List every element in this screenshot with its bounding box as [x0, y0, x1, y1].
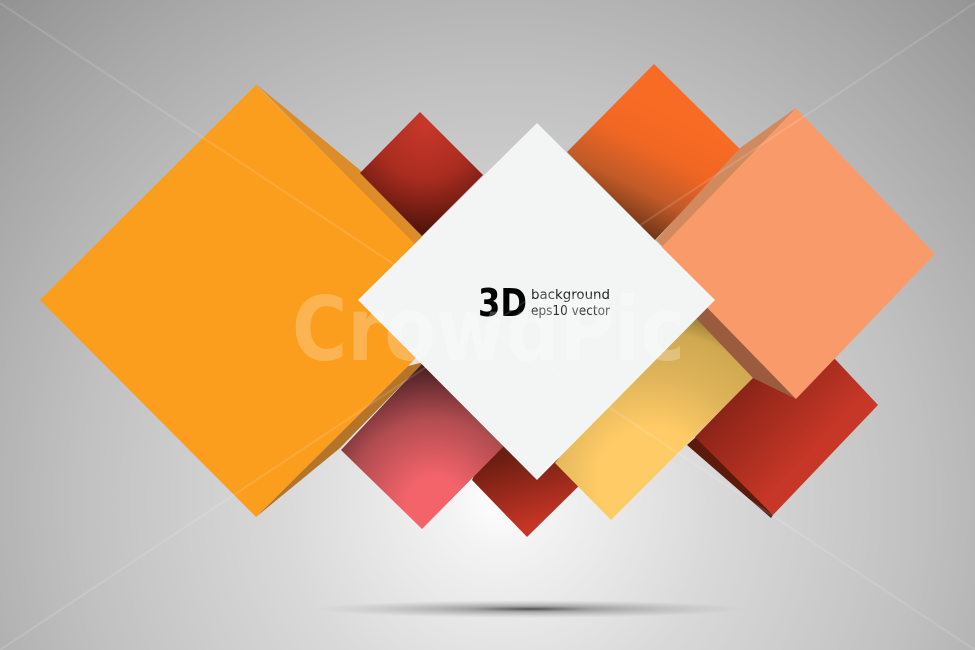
- red right front face: [695, 359, 878, 515]
- tile: pink: [341, 355, 505, 529]
- peach bottom side face: [690, 300, 796, 399]
- centre label: [478, 281, 611, 325]
- eps10 vector line: eps10 vector: [531, 304, 611, 319]
- tile: yellow: [555, 300, 753, 520]
- red right side face: [687, 436, 773, 518]
- watermark text: CrowdPic: [292, 278, 685, 381]
- amber front face: [40, 85, 418, 517]
- background line: background: [531, 288, 610, 303]
- peach top side face: [656, 108, 796, 248]
- tile: dark red top: [360, 112, 483, 236]
- tile: peach: [655, 108, 935, 399]
- floor shadow: [315, 600, 745, 618]
- tile: white centre: [358, 123, 715, 480]
- tile: large amber: [40, 84, 424, 517]
- tile: bottom red: [472, 420, 590, 537]
- tile: red right: [687, 359, 878, 518]
- amber top side face: [256, 84, 424, 246]
- 3D heading: 3D: [478, 281, 527, 325]
- amber bottom side face: [256, 362, 424, 517]
- tile: orange top: [567, 64, 741, 240]
- peach front face: [655, 108, 935, 399]
